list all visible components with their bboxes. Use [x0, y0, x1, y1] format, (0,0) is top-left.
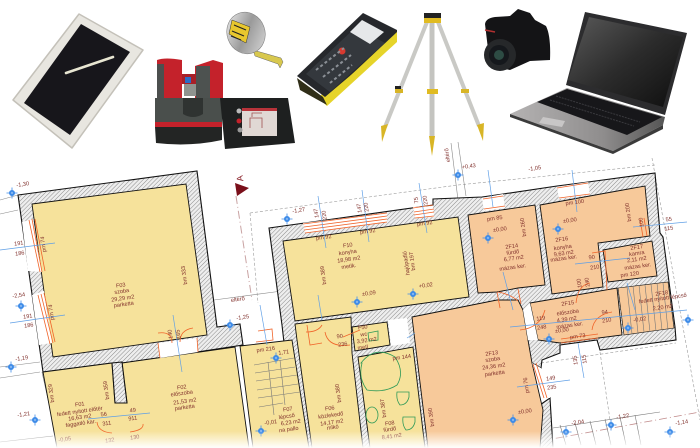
room labels centre: hajópadló	[402, 251, 412, 276]
room labels right: pm 120	[620, 271, 640, 279]
room labels right: 115	[581, 354, 589, 364]
room labels right: 2F14	[505, 243, 519, 251]
room labels right: 240	[584, 277, 592, 287]
bathroom F08	[358, 347, 425, 448]
room: F10	[283, 217, 469, 321]
room labels right: 210	[602, 317, 612, 325]
room labels centre: 18,98 m2	[337, 255, 361, 265]
room labels centre: ±0,09	[362, 290, 376, 298]
room labels left: 186	[15, 250, 25, 258]
room labels centre: F08	[385, 420, 395, 428]
background lines and dashed outlines	[0, 142, 700, 445]
room labels right: 4,39 m2	[556, 316, 577, 324]
room labels right: 2F17	[630, 244, 644, 252]
room labels left: 311	[102, 420, 112, 428]
room labels centre: fürdő	[383, 426, 397, 434]
room labels right: ±0,00	[493, 226, 507, 234]
room labels left: -1,19	[15, 355, 29, 363]
room labels left: bm 359	[103, 380, 111, 400]
room labels right: előszoba	[556, 308, 580, 318]
room labels right: 235	[547, 384, 557, 392]
room labels right: -1,22	[616, 413, 630, 421]
room labels left: 21,53 m2	[173, 397, 197, 407]
room labels right: 210	[590, 264, 600, 272]
room labels left: 49	[129, 408, 136, 414]
icon: laser distance meter	[297, 13, 397, 106]
room labels right: 119	[536, 315, 546, 323]
icon: laptop	[510, 12, 687, 154]
controller tablet	[220, 98, 295, 149]
room labels centre: bm 197	[409, 251, 417, 271]
room labels left: 140	[167, 329, 175, 339]
room labels left: 191	[14, 240, 24, 248]
orange window and door marks	[29, 183, 647, 433]
room labels right: eltérő	[444, 148, 452, 162]
room labels right: pm 76	[523, 377, 531, 393]
room labels left: 29,29 m2	[111, 294, 135, 304]
room: 2F15	[530, 288, 622, 343]
room labels right: bm 260	[520, 217, 528, 237]
room labels right: ±0,00	[518, 408, 532, 416]
room labels right: parketta	[484, 370, 506, 378]
room labels centre: 1,71	[278, 349, 290, 357]
room labels left: faggatló kar.	[65, 419, 97, 429]
room: F01 and F02	[43, 347, 249, 448]
room labels left: 165	[175, 329, 183, 339]
room labels left: parketta	[174, 404, 196, 412]
blue dimension lines	[0, 170, 687, 419]
location markers	[6, 170, 694, 438]
stairs 2F18	[618, 282, 674, 335]
room labels right: 2,20 m2	[652, 304, 673, 312]
room labels right: konyha	[554, 244, 573, 252]
room labels left: fedett nyitott előtér	[57, 406, 103, 418]
room labels right: -1,14	[675, 419, 689, 427]
room labels centre: 75	[414, 197, 420, 204]
room labels right: 24,36 m2	[482, 362, 506, 372]
room labels left: 132	[105, 437, 115, 445]
room labels centre: 236	[338, 341, 348, 349]
room labels left: -2,54	[12, 292, 26, 300]
room: 2F14	[468, 205, 545, 293]
room labels right: ±0,00	[555, 327, 569, 335]
room labels right: 2F16	[555, 236, 569, 244]
room labels right: pm 100	[565, 199, 585, 207]
room labels centre: pm 216	[256, 346, 276, 354]
room labels right: mázas ker.	[550, 254, 578, 264]
room labels centre: bm 390	[428, 407, 436, 427]
wc F50	[352, 322, 390, 351]
room labels right: -2,04	[571, 419, 585, 427]
room labels left	[12, 181, 250, 445]
room labels left: bm 329	[48, 383, 56, 403]
room: F03	[32, 184, 207, 357]
room labels right: 94	[601, 310, 608, 316]
room labels centre: 147	[313, 208, 321, 218]
room labels right: kamra	[629, 250, 646, 258]
room labels left: 130	[130, 434, 140, 442]
room labels centre: közlekedő	[318, 411, 344, 421]
white fade over the bottom edge	[0, 431, 700, 448]
room labels centre: pm 92	[316, 234, 332, 242]
room labels centre	[256, 195, 436, 441]
icon: DSLR camera	[484, 9, 550, 71]
room labels right: bm 200	[625, 202, 633, 222]
room labels left: pm 74	[40, 236, 48, 252]
room labels centre: 220	[321, 210, 329, 220]
room labels right: mázas ker.	[624, 262, 652, 272]
right building walls	[269, 173, 676, 448]
room labels centre: wc	[359, 332, 368, 339]
room labels left: eltérő	[231, 296, 245, 304]
room labels centre: 8,41 m2	[381, 433, 402, 441]
room labels right: 2F13	[485, 350, 499, 358]
room labels centre: 220	[422, 195, 430, 205]
room labels centre: mlkö	[327, 424, 339, 432]
room labels left: 191	[23, 313, 33, 321]
room labels centre: metl	[357, 344, 369, 352]
room labels right: 100	[576, 278, 584, 288]
room labels left: 56	[100, 412, 107, 418]
room labels centre: 3,92 m2	[356, 337, 377, 345]
room labels centre: F07	[283, 406, 293, 414]
room: 2F16	[540, 186, 650, 294]
room labels left: bm 333	[181, 265, 189, 285]
room labels left: parketta	[113, 301, 135, 309]
room labels centre: bm 389	[320, 265, 328, 285]
room labels right: szoba	[485, 356, 502, 364]
left apartment walls	[18, 171, 243, 403]
room labels centre: F06	[325, 405, 335, 413]
room labels right: mázas ker.	[556, 321, 584, 331]
room labels right	[444, 148, 689, 427]
room labels right: fedett nyitott lépcső	[639, 293, 687, 305]
room: 2F13	[412, 300, 543, 448]
room labels left: előszoba	[170, 389, 194, 399]
room labels left: 186	[24, 322, 34, 330]
room labels right: 2F15	[561, 300, 575, 308]
room labels right: 55	[665, 217, 672, 223]
room labels left: -1,30	[16, 181, 30, 189]
room labels centre: lépcső	[278, 413, 295, 421]
room labels right: 9,63 m2	[553, 250, 574, 258]
bathroom fixtures	[361, 331, 415, 430]
room labels left: 911	[128, 415, 138, 423]
icon: 3D laser scanner with controller	[155, 58, 295, 149]
room labels centre: 6,23 m2	[280, 419, 301, 427]
icon: tripod	[381, 13, 484, 156]
floor plan	[0, 142, 700, 448]
room labels right: fürdő	[506, 249, 520, 257]
room labels right: -1,05	[528, 165, 542, 173]
room labels left: -1,21	[17, 411, 31, 419]
room labels centre: pm 92	[360, 228, 376, 236]
section marker A: A	[235, 175, 245, 182]
room labels right: 2F18	[655, 290, 669, 298]
room labels left: F01	[75, 401, 85, 409]
stairs room F07	[240, 340, 309, 448]
room labels left: pm 74	[48, 304, 56, 320]
room labels right: 149	[546, 375, 556, 383]
room: 2F17	[603, 241, 657, 282]
room labels right: 90	[588, 255, 595, 261]
room labels right: +0,43	[461, 163, 476, 171]
room labels centre: konyha	[339, 249, 358, 257]
room labels right: -0,02	[633, 316, 647, 324]
icon: tape measure	[221, 7, 283, 68]
room labels centre: 14,17 m2	[320, 418, 344, 428]
room labels centre: metlk.	[341, 263, 357, 271]
room labels right: ±0,00	[563, 217, 577, 225]
room labels centre: F10	[343, 242, 353, 250]
room labels left: 16,63 m2	[68, 413, 92, 423]
room labels left: -1,25	[236, 314, 250, 322]
corridor F06	[295, 317, 363, 448]
room labels right: pm 73	[570, 333, 586, 341]
room labels centre: bm 380	[335, 383, 343, 403]
room labels centre: pm 144	[392, 354, 412, 362]
room labels right: 2,11 m2	[627, 256, 647, 264]
room labels right: 135	[572, 355, 580, 365]
room labels right: pm 85	[487, 215, 503, 223]
room labels left: F02	[177, 384, 187, 392]
room labels centre: -1,27	[292, 207, 306, 215]
room labels centre: 220	[363, 202, 371, 212]
room labels centre: 90	[336, 334, 343, 340]
wall stub between F01 and F02	[112, 362, 127, 403]
room labels left: -0,05	[58, 436, 72, 444]
room labels centre: 147	[356, 203, 364, 213]
room labels right: mázas ker.	[499, 263, 527, 273]
room labels centre: bm 387	[380, 398, 388, 418]
room labels centre: pm 92	[417, 220, 433, 228]
room labels right: 115	[664, 225, 674, 233]
room labels centre: -0,01	[264, 419, 278, 427]
room labels left: F03	[116, 282, 126, 290]
room labels right: 100	[638, 217, 646, 227]
room labels centre: F50	[358, 324, 368, 332]
stair treads	[254, 358, 300, 415]
room labels right: 248	[537, 324, 547, 332]
white windows and doors	[22, 182, 590, 398]
icon: tablet with stylus	[13, 14, 143, 148]
room labels right: 6,77 m2	[503, 255, 524, 263]
room labels centre: na pallo	[279, 426, 299, 434]
room labels centre: +0,02	[418, 282, 433, 290]
section marker A	[235, 175, 249, 196]
room labels left: szoba	[114, 288, 131, 296]
